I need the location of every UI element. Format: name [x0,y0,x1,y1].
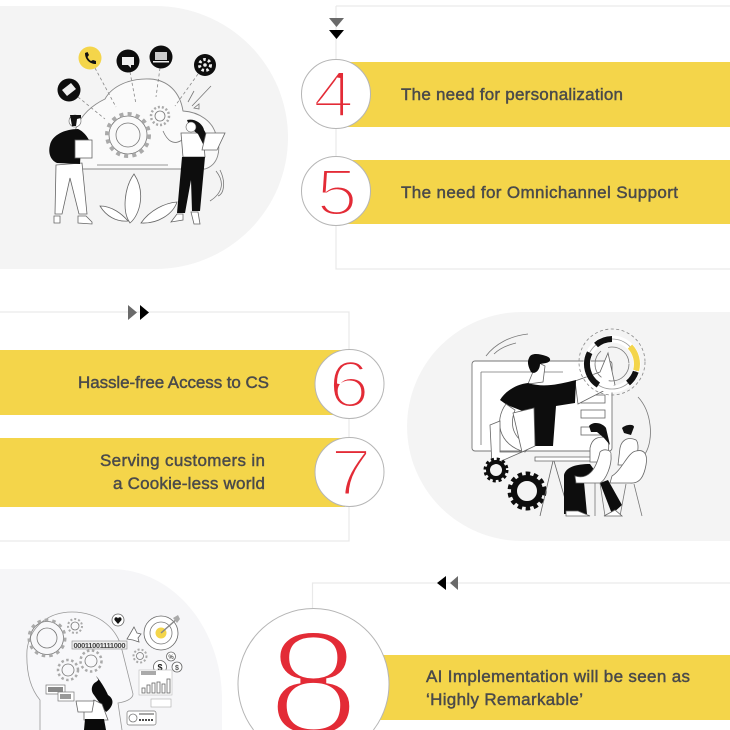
label: The need for personalization [401,85,623,104]
bar [345,160,730,224]
head gears [29,619,146,680]
frame: top connector [336,6,730,269]
panel: bottom illustration background [0,569,222,730]
frame: middle connector [0,312,349,541]
audience [564,423,647,516]
label [100,451,265,493]
bar [0,438,345,507]
label: Hassle-free Access to CS [78,373,269,392]
dashed connector lines [78,68,198,119]
arrow: down triangles [329,18,344,39]
icon: chat [116,50,140,72]
dollar coins [154,652,182,674]
chat boxes [46,685,74,701]
panel: top illustration background [0,6,288,269]
label: ‘Highly Remarkable’ [426,690,583,709]
table [535,457,592,516]
number badge: 6 [328,347,370,421]
head outline [27,612,133,730]
illustration: AI head with analytics [27,612,182,730]
target with arrow [144,615,180,650]
bar [345,62,730,127]
heart [112,614,124,626]
label [426,667,690,709]
profile cards [127,699,171,725]
label: a Cookie-less world [113,474,265,493]
item 4 [302,57,730,131]
panel: middle illustration background [407,312,730,541]
cloud with gears [71,79,219,169]
arrow: right triangles [128,305,149,320]
woman with laptop [76,676,112,730]
monitor [472,361,612,451]
label: Serving customers in [100,451,265,470]
icon: phone [78,46,102,70]
star [127,627,141,642]
number badge [302,57,370,131]
binary code: 00011001111000 [74,641,126,650]
man with tablet [49,115,92,224]
item 5 [302,155,730,229]
number badge: 5 [316,155,358,229]
bar [380,655,730,720]
motion lines [188,86,224,201]
item 6 [0,347,384,421]
number badge [302,155,370,229]
item 7 [0,435,384,509]
number badge: 4 [313,57,354,131]
donut chart [579,329,645,395]
number badge [315,435,384,509]
icon: envelope [58,78,80,102]
presenter [490,353,615,465]
illustration: team around cloud with channels [49,46,225,224]
number badge [238,599,389,730]
dollar coins: $ [157,662,163,672]
icon: laptop [150,46,172,68]
monitor contents [481,372,605,445]
bar [0,350,345,415]
bar chart [139,670,172,695]
illustration: presenter and audience [472,329,650,516]
dollar coins: $ [175,665,179,672]
number badge: 7 [330,435,372,509]
icon: network dots [194,54,216,76]
frame: bottom connector [312,583,730,610]
label: The need for Omnichannel Support [401,183,678,202]
black gears [485,459,544,508]
dollar coins: % [168,655,174,661]
arrow: left triangles [437,576,458,590]
motion arcs [486,334,650,454]
woman with paper [163,120,225,224]
leaves [100,174,177,223]
number badge [315,347,384,421]
label: AI Implementation will be seen as [426,667,690,686]
item 8 [238,599,730,730]
